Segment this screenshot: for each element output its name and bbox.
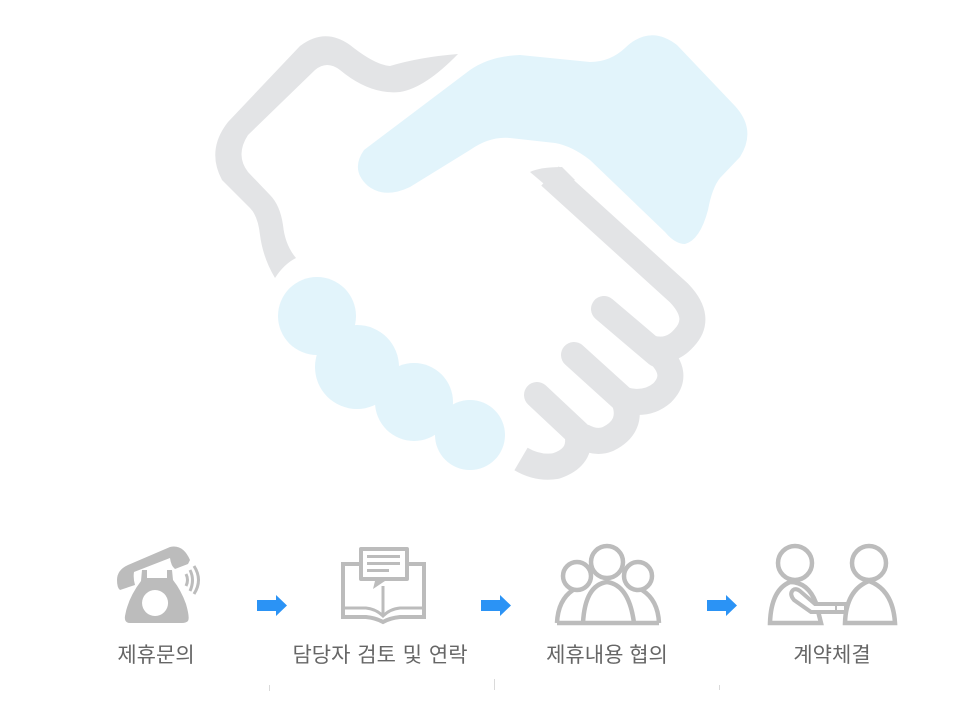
step 2: book: [292, 547, 468, 667]
label: 제휴내용 협의: 제휴내용 협의: [546, 644, 668, 667]
icon: two people shaking hands: [770, 546, 895, 623]
arrow 2: [481, 595, 511, 616]
step 4: contract: [770, 546, 895, 667]
label: 담당자 검토 및 연락: 담당자 검토 및 연락: [292, 644, 468, 667]
icon: three people: [557, 546, 659, 623]
blue right hand: [358, 35, 747, 244]
blue left fingers: [278, 277, 505, 470]
arrow 1: [257, 595, 287, 616]
label: 계약체결: 계약체결: [793, 644, 871, 667]
gray right hand fingers: [521, 176, 692, 467]
handshake illustration: [215, 35, 747, 470]
step 1: telephone: [117, 547, 198, 667]
step 3: group: [546, 546, 668, 667]
tick marks: [270, 679, 720, 691]
arrow 3: [707, 595, 737, 616]
icon: open book with speech bubble: [343, 547, 424, 622]
label: 제휴문의: 제휴문의: [117, 644, 195, 667]
gray left arm outline: [215, 36, 458, 278]
icon: telephone: [117, 547, 198, 623]
gray finger band tip: [530, 167, 575, 189]
